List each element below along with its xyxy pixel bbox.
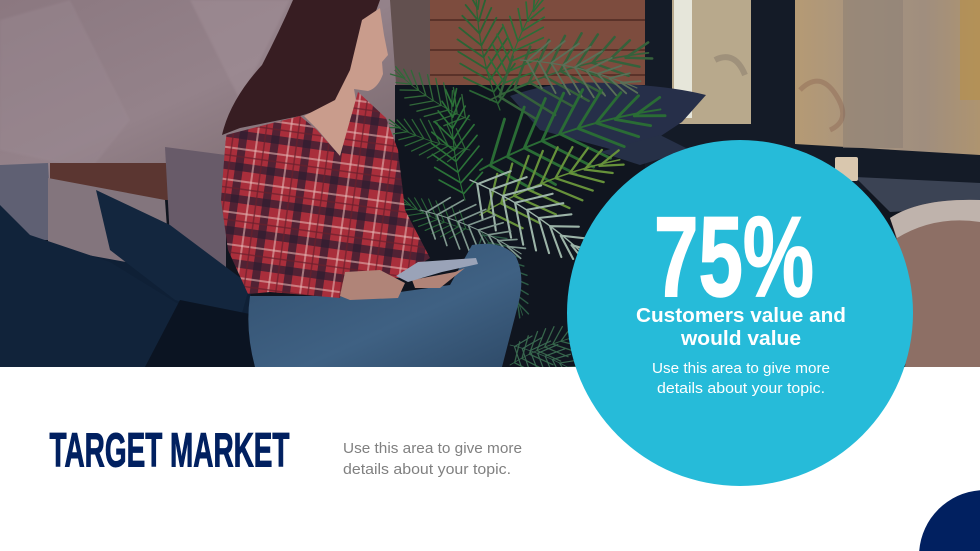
big number: 75%: 75% [654, 194, 814, 321]
photo: window [645, 0, 980, 155]
photo: dark interior behind plant [395, 85, 645, 200]
photo: fur cushion [890, 200, 980, 367]
photo: tablet [396, 258, 478, 282]
photo: hands [340, 268, 465, 300]
photo: palm plant [388, 0, 666, 367]
description text [343, 440, 522, 478]
photo: brick wall [430, 0, 645, 85]
stat heading: would value [680, 328, 801, 350]
description text: details about your topic. [343, 461, 511, 478]
stat heading: Customers value and [636, 305, 846, 327]
photo: window sill and candle [835, 157, 980, 212]
photo: jeans [248, 244, 521, 367]
photo: dark base [45, 190, 906, 367]
stat description [652, 360, 830, 397]
photo: hair [222, 0, 380, 135]
photo: face and neck [304, 8, 388, 156]
stat description: details about your topic. [657, 380, 825, 397]
description text: Use this area to give more [343, 440, 522, 457]
photo: concrete wall [0, 0, 430, 178]
photo: plaid shirt [221, 92, 430, 298]
stat heading [636, 305, 846, 350]
stat description: Use this area to give more [652, 360, 830, 377]
photo: navy sofa pillows [0, 190, 255, 367]
title: target market: TARGET MARKET [50, 424, 290, 478]
photo: woman on a sofa by a window [0, 0, 980, 389]
photo: sofa cushions [0, 147, 226, 280]
photo: navy cushions on the sill [510, 82, 706, 165]
teal stat circle [567, 140, 913, 486]
photo: sofa back [50, 163, 170, 200]
corner accent circle [919, 490, 980, 551]
